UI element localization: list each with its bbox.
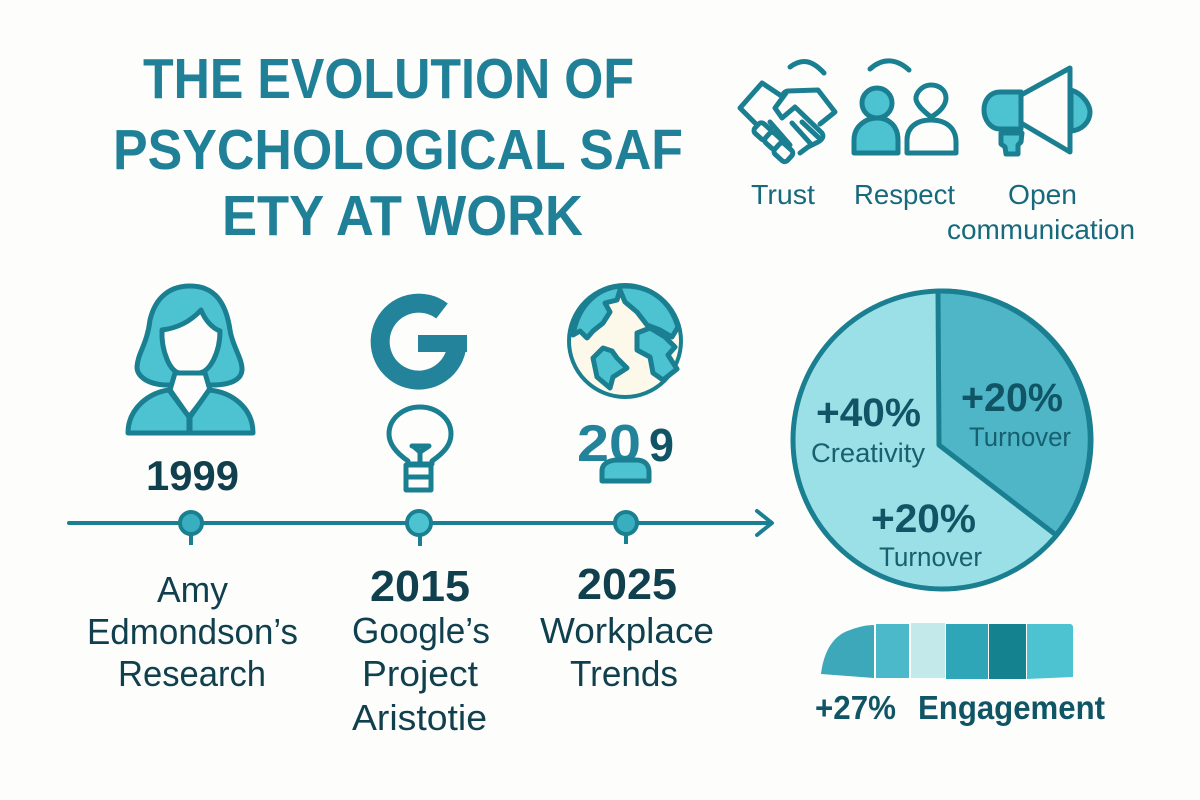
- milestone: 2025 label: 2025: [577, 560, 677, 609]
- title: ETY AT WORK: [222, 184, 583, 248]
- pie label: +20% turnover lower: [871, 497, 982, 572]
- milestone: 2015 label: 2015: [370, 562, 470, 611]
- icon: garbled 2025 with person: [577, 415, 674, 481]
- milestone: 2015 label: Google’s: [352, 610, 490, 651]
- title: PSYCHOLOGICAL SAF: [113, 118, 683, 182]
- pie chart: [793, 291, 1091, 589]
- milestone: 2025 label: Trends: [570, 653, 678, 694]
- label: open communication: communication: [947, 214, 1135, 245]
- icon: globe: [569, 285, 681, 397]
- pie label: +40% creativity: [811, 391, 925, 468]
- label: open communication: [947, 179, 1135, 245]
- title: [113, 47, 683, 248]
- pie label: +20% turnover lower: Turnover: [879, 542, 982, 572]
- pie label: +20% turnover upper: +20%: [961, 376, 1063, 420]
- label: trust: Trust: [751, 179, 815, 210]
- icon: garbled 2025 with person: 9: [649, 419, 674, 471]
- milestone: 2025 label: [540, 560, 714, 694]
- year: 1999: 1999: [146, 452, 239, 499]
- label: respect: Respect: [854, 179, 955, 210]
- node: 2025: [615, 512, 637, 544]
- pie label: +40% creativity: Creativity: [811, 438, 925, 468]
- milestone: 2015 label: Project: [362, 653, 478, 694]
- panel: core values: [740, 61, 1135, 245]
- timeline: [69, 511, 772, 546]
- milestone: 2015 label: [352, 562, 490, 738]
- engagement label: Engagement: [918, 689, 1105, 726]
- milestone: 1999 label: Edmondson’s: [87, 611, 298, 652]
- pie label: +20% turnover upper: [961, 376, 1071, 452]
- milestone: 1999 label: Research: [118, 653, 266, 694]
- segmented engagement bar: [821, 623, 1073, 679]
- milestone: 1999 label: Amy: [157, 569, 228, 610]
- engagement label: +27%: [815, 689, 896, 726]
- title: THE EVOLUTION OF: [143, 47, 634, 111]
- icon: megaphone: [984, 68, 1090, 154]
- icon: light bulb: [389, 407, 451, 490]
- node: 2015: [407, 511, 431, 546]
- milestone: 2025 label: Workplace: [540, 610, 714, 651]
- node: 1999: [180, 512, 202, 545]
- label: open communication: Open: [1008, 179, 1077, 210]
- milestone: 1999 label: [87, 569, 298, 694]
- icon: two people: [854, 61, 956, 153]
- pie label: +20% turnover lower: +20%: [871, 497, 976, 541]
- pie label: +40% creativity: +40%: [816, 391, 921, 435]
- icon: garbled 2025 with person: 20: [577, 415, 641, 473]
- icon: handshake: [740, 61, 835, 163]
- pie label: +20% turnover upper: Turnover: [969, 422, 1071, 452]
- icon: woman portrait: [128, 286, 253, 433]
- engagement label: [815, 689, 1105, 726]
- icon: google G: [380, 303, 467, 380]
- milestone: 2015 label: Aristotie: [352, 697, 487, 738]
